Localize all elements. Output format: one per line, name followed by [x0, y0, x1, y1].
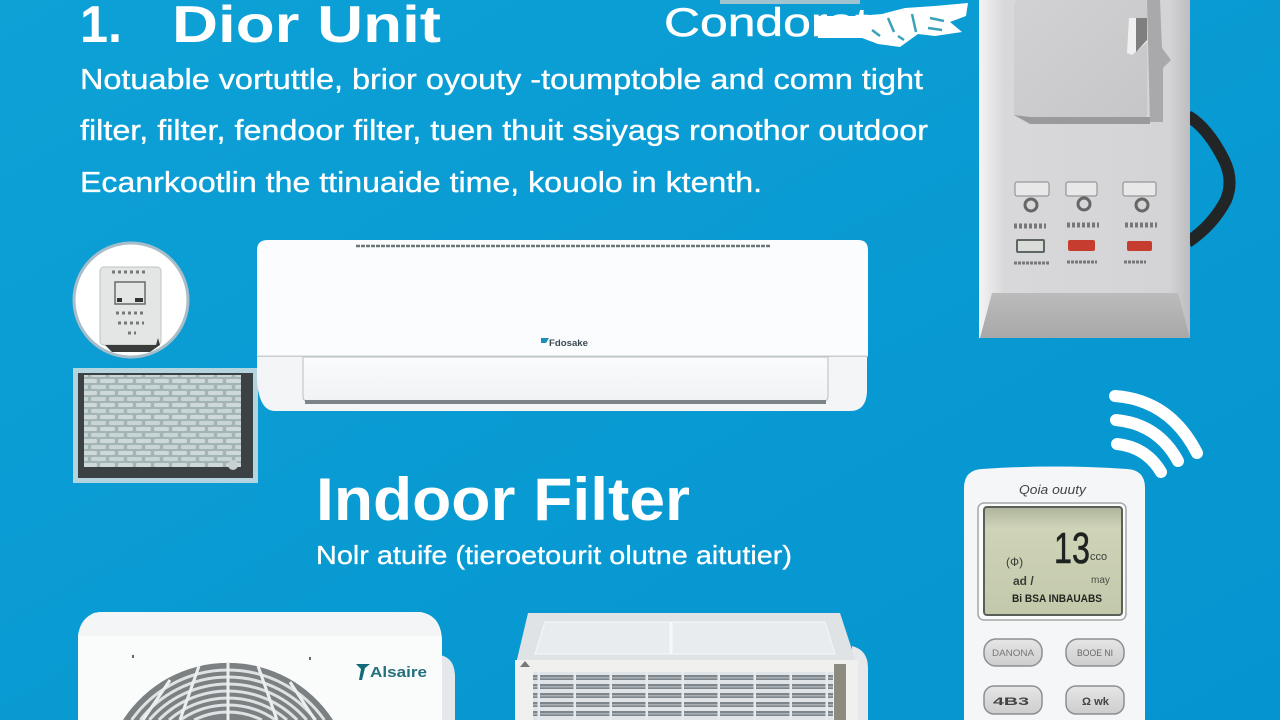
icon: air filter — [73, 368, 258, 483]
remote brand: Qoia ouuty — [1019, 483, 1087, 497]
wiring — [1188, 116, 1230, 242]
brand logo: Fdosake — [549, 338, 588, 348]
remote buttons: Ω wk — [1082, 696, 1110, 708]
wall controller — [979, 0, 1230, 338]
LCD screen: (Ф) — [1006, 555, 1023, 569]
icon: wireless signal — [1115, 396, 1197, 472]
top vent — [356, 245, 771, 247]
subheading: Nolr atuife (tieroetourit olutne aitutier) — [316, 540, 792, 570]
heading: indoor filter: Indoor Filter — [316, 466, 690, 533]
screw marks — [133, 655, 310, 660]
brand logo: Alsaire — [370, 664, 427, 681]
LCD screen — [978, 503, 1126, 620]
heading: condenser label: Condorat — [664, 1, 869, 45]
condenser grille — [533, 672, 833, 720]
heading: condenser label — [664, 0, 968, 47]
control board — [100, 267, 161, 345]
LCD screen: cco — [1090, 551, 1107, 563]
icon: circular control board inset — [74, 243, 188, 357]
remote buttons: DANONA — [992, 648, 1034, 658]
description line 3: Ecanrkootlin the ttinuaide time, kouolo in ktenth. — [80, 167, 762, 199]
description line 2: filter, filter, fendoor filter, tuen thuit ssiyags ronothor outdoor — [80, 115, 928, 147]
outdoor unit: grille model — [515, 613, 868, 720]
description line 1: Notuable vortuttle, brior oyouty -toumptoble and comn tight — [80, 64, 923, 96]
fan guard — [123, 663, 333, 720]
side fins — [834, 664, 846, 720]
LCD screen: ad / — [1013, 574, 1034, 588]
remote buttons: BOOE NI — [1077, 648, 1113, 658]
control buttons — [1014, 182, 1157, 263]
front flap — [303, 357, 828, 402]
description text — [80, 64, 928, 199]
lid side — [1147, 0, 1171, 122]
base — [980, 293, 1190, 338]
outdoor unit: fan model — [78, 612, 455, 720]
LCD digits: 13 — [1054, 524, 1090, 573]
indoor wall unit — [257, 240, 868, 411]
remote buttons: 4B3 — [993, 696, 1029, 708]
lid latch — [1127, 18, 1147, 55]
LCD screen: may — [1091, 575, 1110, 586]
LCD screen: Bi BSA INBAUABS — [1012, 593, 1102, 605]
remote buttons — [984, 639, 1124, 714]
lid — [1014, 0, 1147, 122]
remote control — [964, 466, 1145, 720]
filter mesh — [84, 375, 241, 467]
